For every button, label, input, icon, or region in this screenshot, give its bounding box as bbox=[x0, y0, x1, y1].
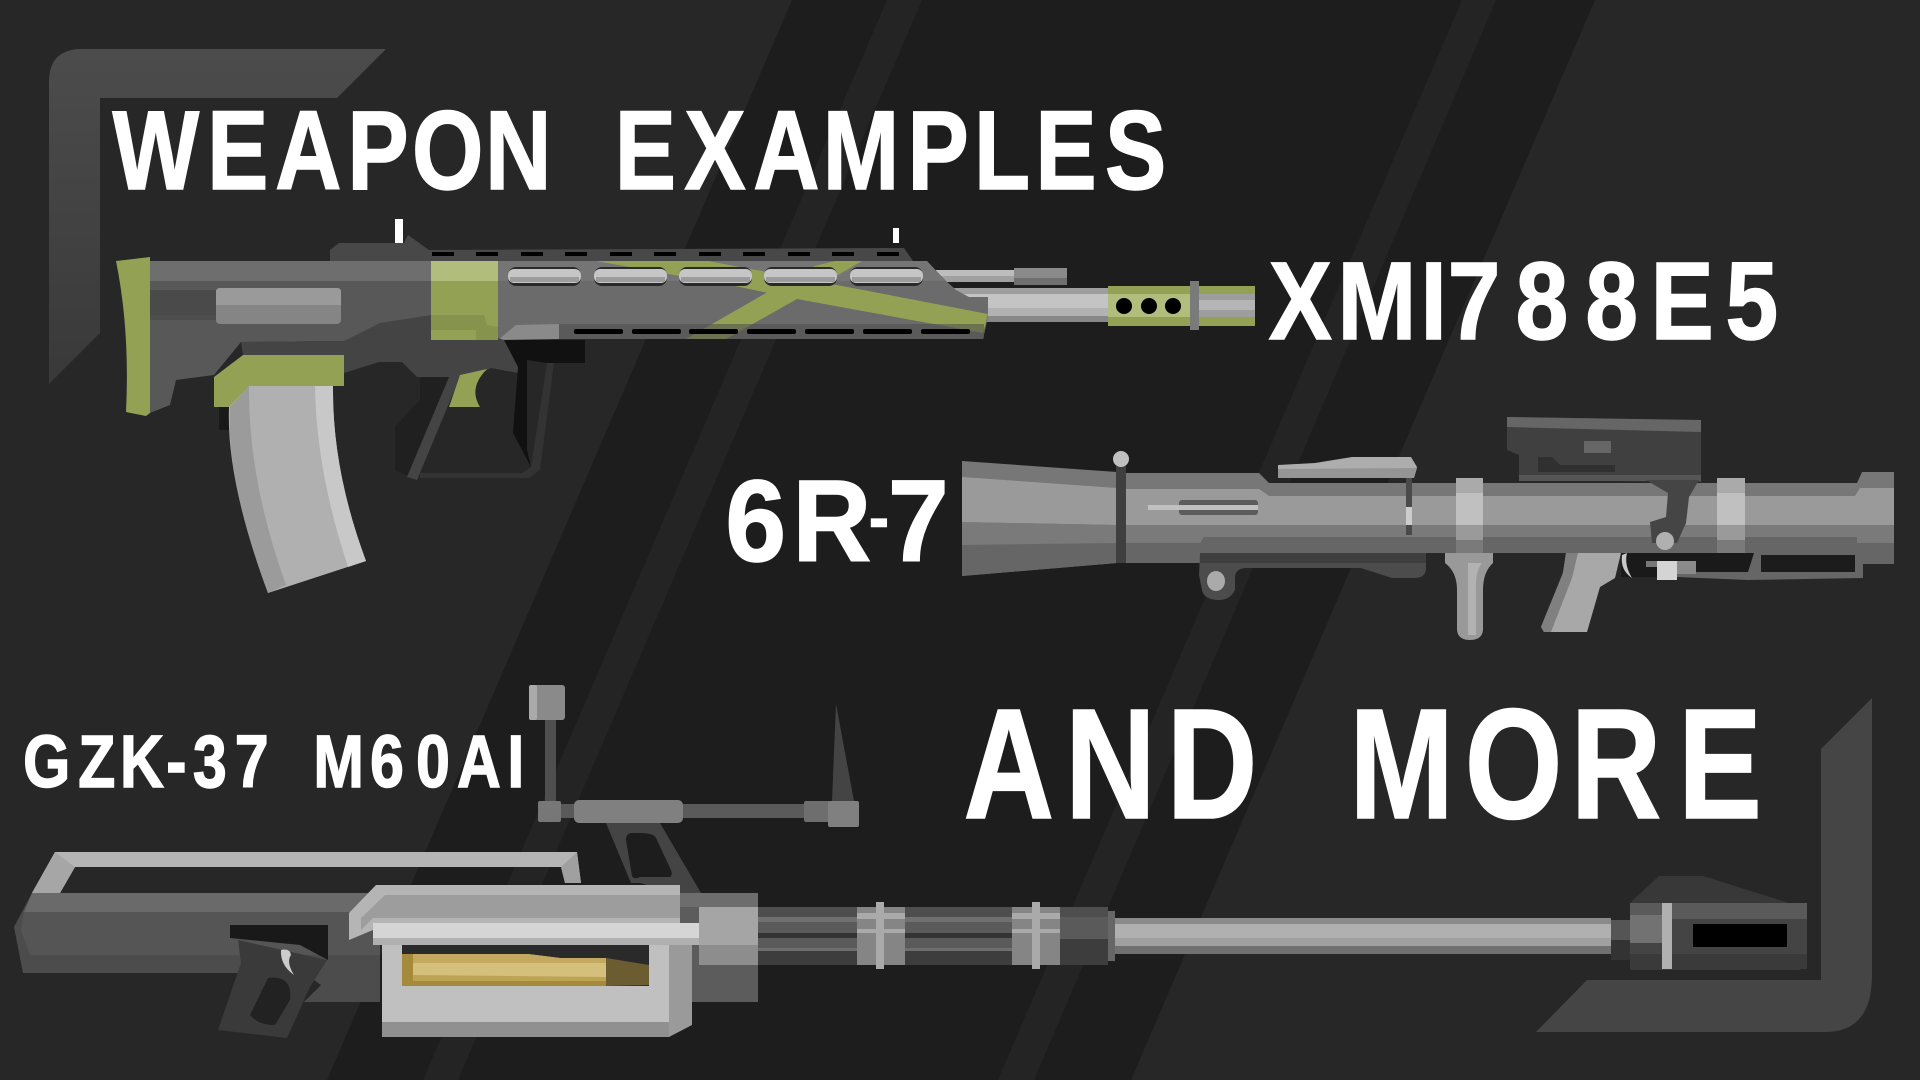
heavy gun: grip bbox=[218, 925, 328, 1038]
label: 6R-7: R bbox=[793, 456, 871, 586]
rifle: barrel bbox=[936, 268, 1110, 322]
launcher: pistol grip bbox=[1541, 553, 1621, 632]
heavy gun: GZK-37 M60A1 bbox=[14, 685, 1807, 1038]
launcher: trigger assembly bbox=[1621, 553, 1863, 580]
heavy gun: muzzle bbox=[1611, 903, 1807, 969]
launcher: scope bracket bbox=[1646, 480, 1699, 550]
heavy gun: main barrel bbox=[1115, 918, 1611, 954]
label: GZK-37 M60A1: GZK-37 M60AI bbox=[23, 721, 524, 803]
label: 6R-7: 7 bbox=[888, 456, 949, 586]
rifle: magazine well bbox=[214, 355, 344, 407]
heavy gun: barrel cluster bbox=[758, 907, 1115, 965]
label: 6R-7: - bbox=[869, 483, 889, 552]
label: and more: AND MORE bbox=[963, 677, 1762, 852]
corner bracket: bottom right bbox=[1536, 698, 1872, 1032]
launcher: tube bands bbox=[1456, 478, 1745, 558]
rifle: butt plate bbox=[116, 257, 150, 416]
heavy gun: receiver housing bbox=[349, 885, 699, 1037]
launcher: main tube bbox=[1116, 472, 1894, 564]
rifle: magazine bbox=[219, 386, 366, 593]
launcher: foregrip bbox=[1445, 553, 1493, 640]
heavy gun: ammo window with cartridge bbox=[402, 945, 649, 986]
corner bracket: top left bbox=[49, 49, 386, 384]
launcher: under rail and sling loop bbox=[1199, 553, 1426, 600]
launcher: top handle bbox=[1278, 457, 1417, 535]
launcher: scope bbox=[1507, 417, 1701, 482]
rifle: XM1788E5 bbox=[116, 219, 1255, 593]
rifle: handguard bbox=[498, 261, 988, 340]
rifle: top rail and sights bbox=[330, 219, 913, 261]
heavy gun: barrel clamps bbox=[857, 902, 1060, 969]
title: WEAPON EXAMPLES bbox=[112, 87, 1166, 213]
label: XM1788E5: XMI788E5 bbox=[1269, 239, 1778, 363]
rifle: pistol grip and trigger guard bbox=[395, 340, 585, 480]
rocket launcher: 6R-7 bbox=[962, 417, 1894, 640]
launcher: flared rear bell bbox=[962, 461, 1117, 576]
heavy gun: stock body bbox=[14, 893, 380, 1002]
label: 6R-7: 6 bbox=[725, 456, 786, 586]
rifle: muzzle brake bbox=[1108, 281, 1255, 330]
launcher: front sight post bbox=[1113, 451, 1129, 563]
heavy gun: top frame bbox=[32, 852, 581, 893]
heavy gun: bipod bbox=[529, 685, 859, 893]
heavy gun: front block bbox=[680, 893, 758, 1002]
rifle: stock and receiver bbox=[150, 261, 518, 413]
